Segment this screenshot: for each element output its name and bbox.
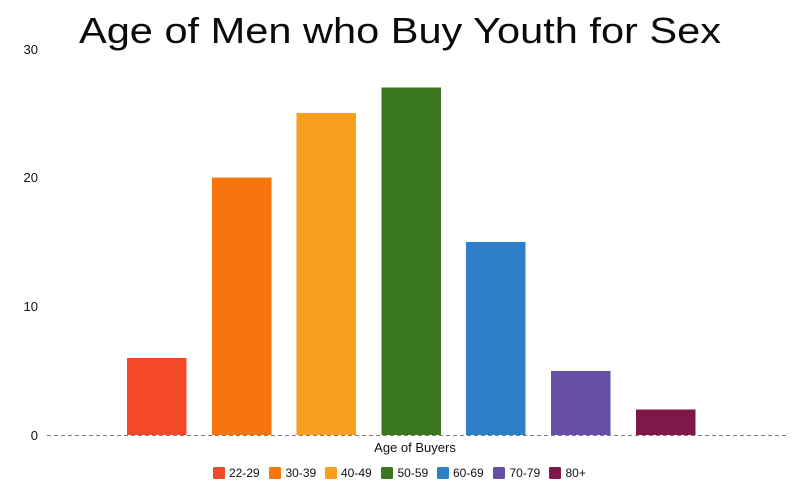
legend item: 22-29: 22-29: [229, 466, 260, 480]
y axis labels: 10: [24, 299, 38, 314]
legend: [213, 466, 586, 480]
bar: 22-29: [127, 358, 186, 435]
legend item: 30-39: 30-39: [286, 466, 317, 480]
legend item: 80+: [549, 466, 586, 480]
legend item: 60-69: [437, 466, 484, 480]
bar: 70-79: [551, 371, 610, 435]
legend item: 70-79: [493, 466, 541, 480]
legend item: 30-39: [269, 466, 317, 480]
y axis labels: 20: [24, 170, 38, 185]
legend item: 22-29: [213, 466, 260, 480]
legend item: 50-59: 50-59: [398, 466, 429, 480]
bar chart: [127, 88, 696, 435]
legend item: 70-79: 70-79: [510, 466, 541, 480]
y axis labels: [24, 42, 38, 443]
legend item: 40-49: [325, 466, 372, 480]
bar: 80+: [636, 410, 696, 435]
x axis title: Age of Buyers: [374, 440, 456, 455]
legend item: 80+: 80+: [566, 466, 586, 480]
y axis labels: 30: [24, 42, 38, 57]
bar: 30-39: [212, 178, 272, 435]
bar: 40-49: [296, 113, 356, 435]
title: Age of Men who Buy Youth for Sex: [79, 10, 721, 51]
bar: 50-59: [382, 88, 441, 435]
legend item: 50-59: [381, 466, 429, 480]
bar: 60-69: [466, 242, 526, 435]
legend item: 60-69: 60-69: [453, 466, 484, 480]
y axis labels: 0: [31, 428, 38, 443]
legend item: 40-49: 40-49: [341, 466, 372, 480]
